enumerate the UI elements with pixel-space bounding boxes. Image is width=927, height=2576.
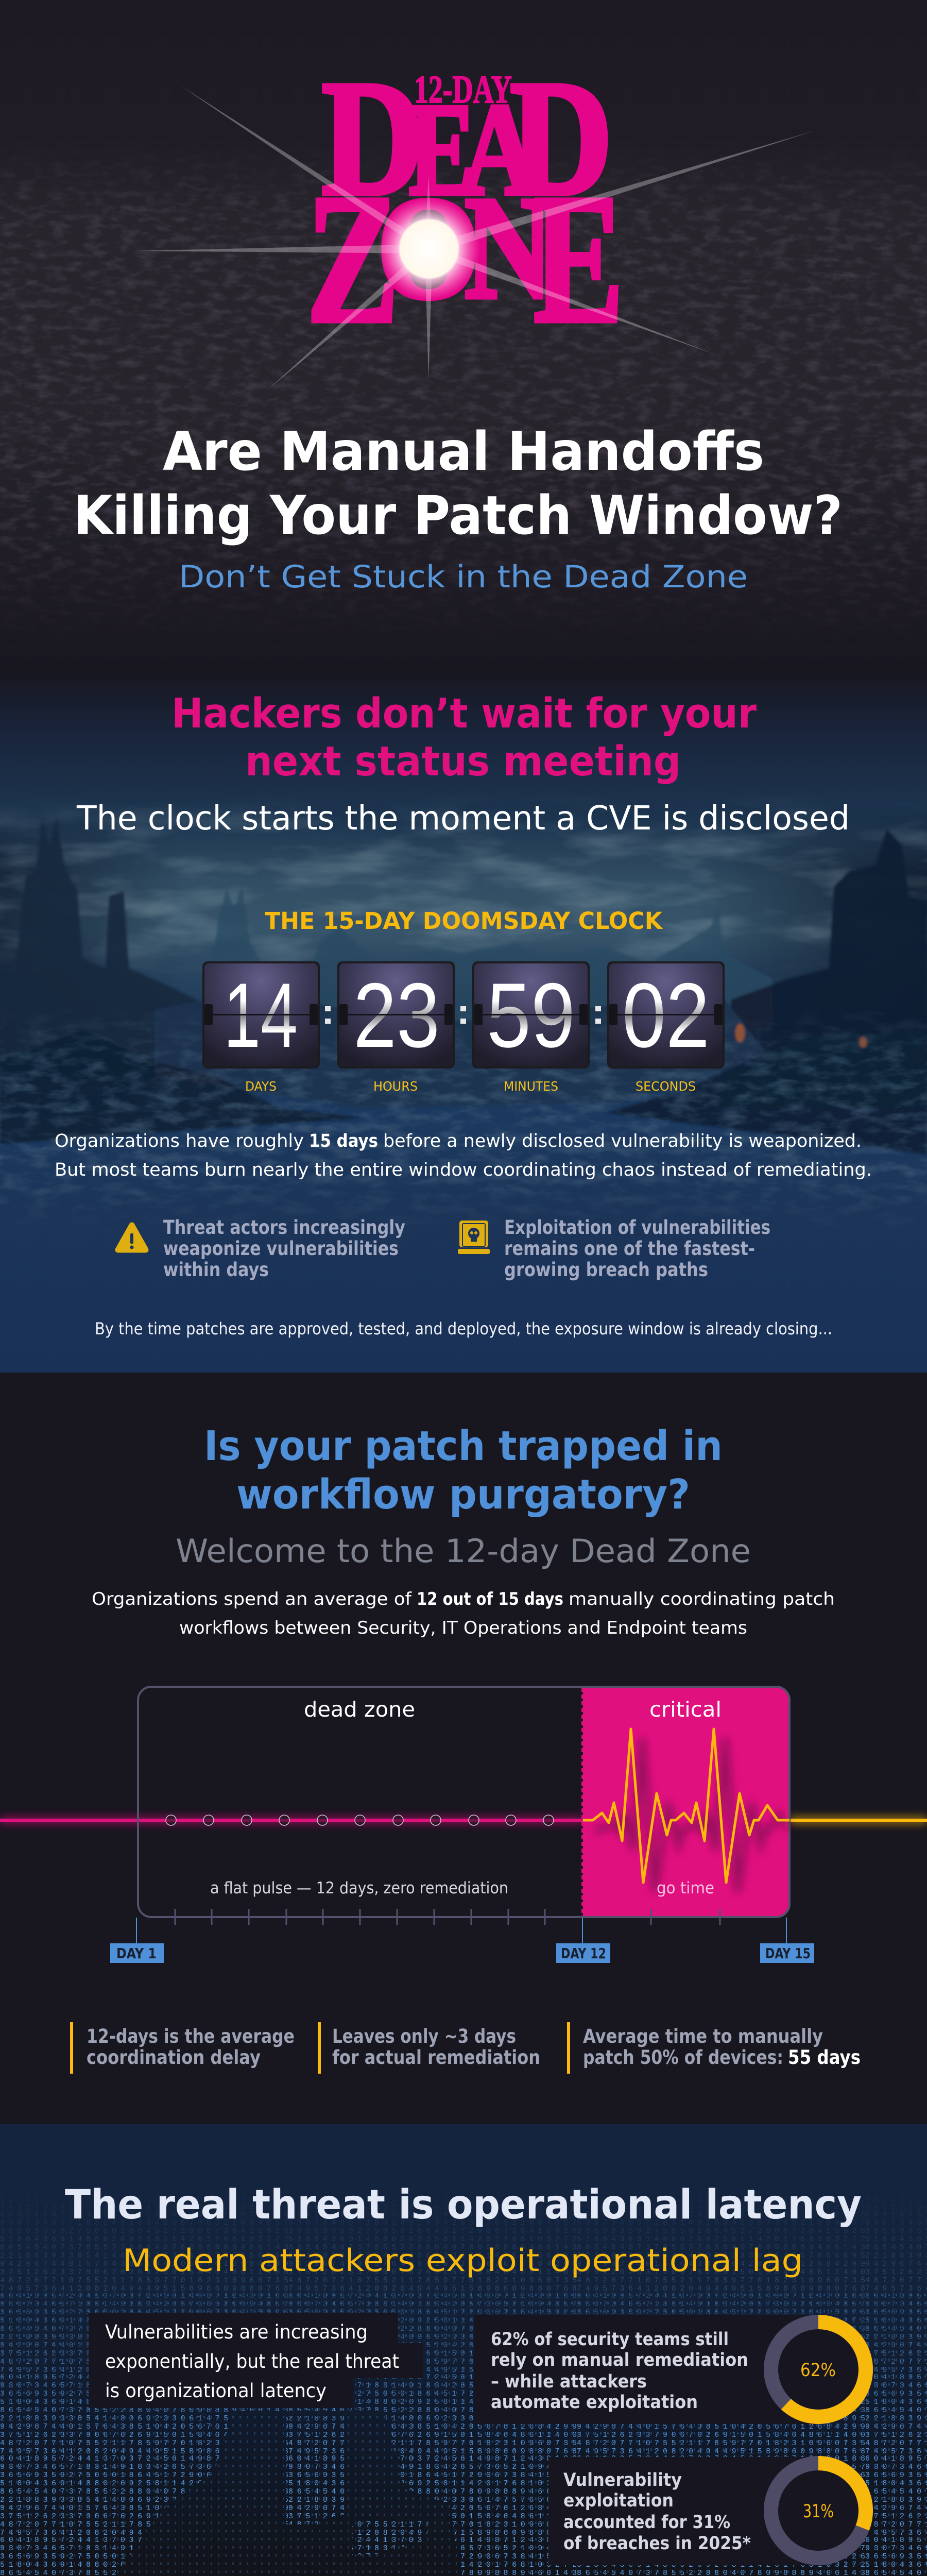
text callout: organizational latency: is organizational latency <box>105 2380 327 2402</box>
hero title <box>74 421 843 547</box>
heading: Is your patch trapped in <box>204 1422 723 1470</box>
subheading: Welcome to the 12-day Dead Zone <box>176 1532 751 1570</box>
pulse line glow after <box>789 1817 927 1824</box>
clock unit labels <box>245 1079 696 1094</box>
ruined city backdrop <box>0 819 927 1154</box>
body paragraph: Organizations have roughly <box>55 1131 304 1151</box>
stat card: 31% of breaches: Vulnerability <box>563 2470 682 2490</box>
hero logo: 12-Day Dead Zone <box>133 47 816 391</box>
callout: exploitation <box>504 1216 770 1281</box>
day markers <box>110 1918 814 1963</box>
hero logo: 12-Day Dead Zone: O <box>377 166 480 329</box>
clock colons <box>325 1006 601 1024</box>
stat card: 31% of breaches <box>548 2456 873 2565</box>
intro text <box>92 1589 835 1638</box>
stat card: 31% of breaches: of breaches in 2025* <box>563 2533 751 2554</box>
heading: Hackers don’t wait for your <box>171 690 757 737</box>
clock unit labels: HOURS <box>373 1079 418 1094</box>
critical zone <box>583 1687 789 1917</box>
donut chart: 62%: 62% <box>800 2360 836 2381</box>
text callout: organizational latency: Vulnerabilities are increasing <box>105 2321 368 2343</box>
flip clock: hours: 23 <box>353 964 440 1066</box>
body paragraph: But most teams burn nearly the entire window coordinating chaos instead of remediating. <box>55 1160 872 1180</box>
hero title: Are Manual Handoffs <box>163 421 764 483</box>
zone captions: go time <box>657 1879 714 1897</box>
zone labels: dead zone <box>304 1697 415 1722</box>
stat: manual patch time <box>567 2022 861 2074</box>
heading <box>171 690 757 785</box>
pulse line glow before <box>0 1817 583 1824</box>
zone labels <box>304 1697 722 1722</box>
stat: coordination delay <box>70 2022 295 2074</box>
hero logo: 12-Day Dead Zone: 12-DAY <box>414 68 512 111</box>
ekg shadow <box>594 1738 789 1892</box>
zone frame <box>138 1687 789 1917</box>
donut chart: 31% <box>764 2456 873 2565</box>
callout: threat actors: Threat actors increasingly <box>163 1216 405 1239</box>
callout: threat actors <box>163 1216 405 1281</box>
stat: remediation time: Leaves only ~3 days <box>332 2025 516 2047</box>
heading: next status meeting <box>245 738 681 785</box>
hero title: Killing Your Patch Window? <box>74 485 843 547</box>
subheading: Modern attackers exploit operational lag <box>123 2243 803 2279</box>
text callout: organizational latency <box>89 2313 423 2408</box>
stat card: 62% manual remediation: automate exploitation <box>491 2392 698 2413</box>
flip clock: seconds: 02 <box>622 964 710 1066</box>
hero logo: 12-Day Dead Zone: E <box>534 156 624 361</box>
intro text: Organizations spend an average of <box>92 1589 412 1609</box>
section: operational latency <box>0 2124 927 2576</box>
intro text: workflows between Security, IT Operations and Endpoint teams <box>179 1618 747 1638</box>
clock unit labels: MINUTES <box>504 1079 558 1094</box>
body paragraph <box>55 1131 872 1180</box>
stat card: 62% manual remediation: rely on manual remediation <box>491 2350 748 2370</box>
heading <box>204 1422 723 1518</box>
clock unit labels: SECONDS <box>636 1079 696 1094</box>
hero section <box>0 76 927 622</box>
stat: coordination delay: coordination delay <box>87 2046 261 2069</box>
icon: skull on device <box>458 1221 490 1254</box>
clock unit labels: DAYS <box>245 1079 277 1094</box>
callout: threat actors: within days <box>163 1259 269 1281</box>
closing note: By the time patches are approved, tested, and deployed, the exposure window is already closing... <box>95 1319 832 1338</box>
callout: exploitation: growing breach paths <box>504 1259 708 1281</box>
section: doomsday clock <box>0 670 927 1372</box>
section: workflow purgatory <box>0 1422 927 2074</box>
stat: remediation time: for actual remediation <box>332 2046 540 2069</box>
hero logo: 12-Day Dead Zone: D <box>321 47 424 230</box>
stat: manual patch time: 55 days <box>788 2046 861 2069</box>
hero logo: 12-Day Dead Zone: N <box>465 166 553 329</box>
heading: workflow purgatory? <box>236 1471 690 1518</box>
intro text: 12 out of 15 days <box>417 1589 563 1609</box>
donut chart: 62% <box>764 2315 873 2424</box>
clock title: THE 15-DAY DOOMSDAY CLOCK <box>265 907 663 935</box>
body paragraph: 15 days <box>309 1131 378 1151</box>
hero logo: 12-Day Dead Zone: D <box>510 47 613 230</box>
stat card: 31% of breaches: exploitation <box>563 2490 674 2511</box>
stat: remediation time <box>318 2022 540 2074</box>
ekg pulse <box>583 1729 789 1883</box>
callout: exploitation: remains one of the fastest- <box>504 1238 755 1260</box>
flip clock: days: 14 <box>224 964 298 1066</box>
dead zone markers <box>166 1815 554 1825</box>
day ticks <box>175 1909 720 1925</box>
heading: The real threat is operational latency <box>65 2182 862 2228</box>
icon: warning triangle <box>118 1225 146 1250</box>
day markers: DAY 1 <box>116 1945 157 1962</box>
hero logo: 12-Day Dead Zone: E <box>409 77 476 223</box>
stat card: 31% of breaches: accounted for 31% <box>563 2512 730 2533</box>
stat card: 62% manual remediation: 62% of security teams still <box>491 2329 729 2350</box>
donut chart: 31%: 31% <box>803 2501 834 2522</box>
stat: coordination delay: 12-days is the average <box>87 2025 295 2047</box>
timeline chart <box>0 1687 927 1963</box>
callout: exploitation: Exploitation of vulnerabilities <box>504 1216 770 1239</box>
zone captions: a flat pulse — 12 days, zero remediation <box>210 1879 508 1897</box>
stat: manual patch time: Average time to manually <box>583 2025 823 2047</box>
subheading: The clock starts the moment a CVE is disclosed <box>76 800 850 838</box>
zone labels: critical <box>649 1697 722 1722</box>
callout: threat actors: weaponize vulnerabilities <box>163 1238 399 1260</box>
day markers: DAY 15 <box>765 1945 811 1962</box>
text callout: organizational latency: exponentially, but the real threat <box>105 2350 399 2372</box>
day markers: DAY 12 <box>561 1945 606 1962</box>
flip clock: minutes: 59 <box>487 964 575 1066</box>
zone captions <box>210 1879 714 1897</box>
hero subtitle: Don’t Get Stuck in the Dead Zone <box>179 559 748 595</box>
stat: manual patch time: patch 50% of devices: <box>583 2046 783 2069</box>
intro text: manually coordinating patch <box>569 1589 835 1609</box>
hero logo: 12-Day Dead Zone: A <box>461 77 538 223</box>
hero logo: 12-Day Dead Zone: Z <box>306 156 399 361</box>
body paragraph: before a newly disclosed vulnerability is weaponized. <box>383 1131 862 1151</box>
stat card: 62% manual remediation <box>474 2315 873 2424</box>
stat card: 62% manual remediation: – while attackers <box>491 2371 647 2392</box>
